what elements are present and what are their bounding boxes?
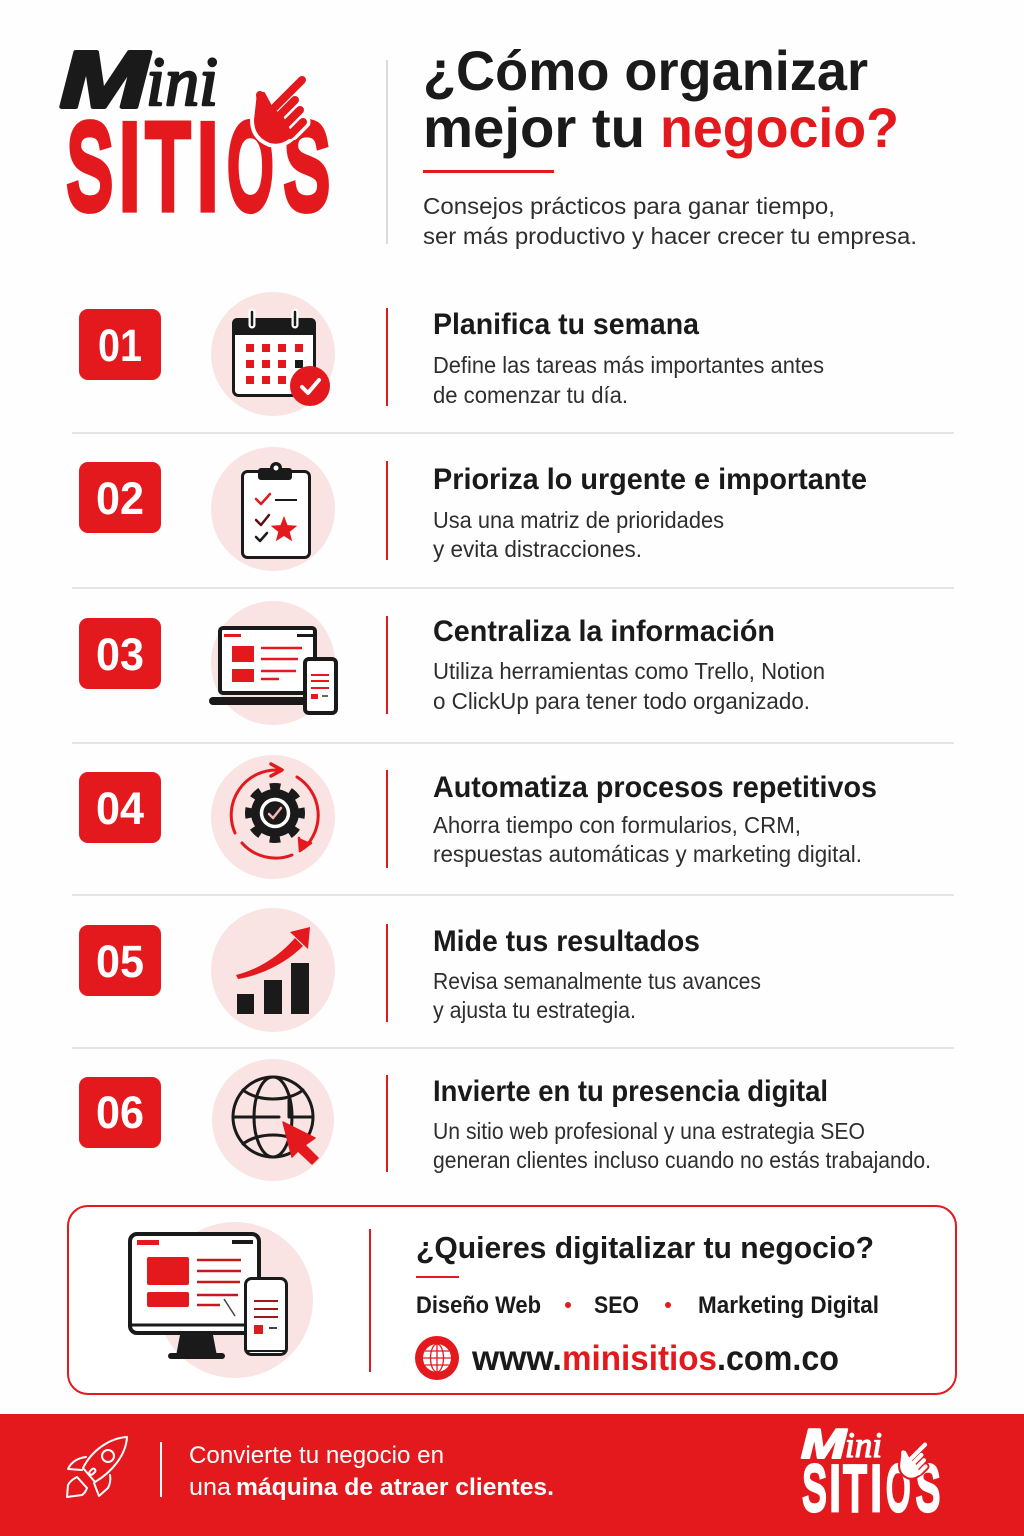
step description: Revisa semanalmente tus avances: [433, 968, 761, 994]
services list: SEO: [594, 1292, 639, 1319]
footer slogan: [189, 1442, 554, 1501]
number badge 04: [79, 772, 161, 843]
step description: [433, 658, 825, 714]
logo script word: ini: [146, 44, 218, 121]
footer logo: S: [802, 1453, 826, 1524]
step 02: [79, 447, 867, 571]
logo: Mini Sitios: [60, 35, 329, 234]
number badge 05: 05: [96, 936, 144, 987]
step description: Define las tareas más importantes antes: [433, 352, 824, 378]
icon: gear with cycle arrows: [211, 755, 335, 879]
subtitle: [423, 193, 917, 249]
step description: o ClickUp para tener todo organizado.: [433, 688, 810, 714]
icon: web globe: [415, 1336, 459, 1380]
title underline: [423, 170, 554, 173]
step 01: [79, 292, 824, 416]
footer logo: T: [844, 1454, 867, 1525]
number badge 02: [79, 462, 161, 533]
logo block word: I: [118, 99, 141, 233]
number badge 06: 06: [96, 1087, 144, 1138]
call to action heading: ¿Quieres digitalizar tu negocio?: [416, 1230, 874, 1265]
step description: generan clientes incluso cuando no estás trabajando.: [433, 1147, 931, 1173]
logo script word: [60, 35, 218, 124]
step description: de comenzar tu día.: [433, 382, 628, 408]
footer band: [0, 1414, 1024, 1536]
step description: Usa una matriz de prioridades: [433, 507, 724, 533]
step 05: [79, 908, 761, 1032]
step description: Utiliza herramientas como Trello, Notion: [433, 658, 825, 684]
title: [423, 39, 899, 159]
icon: globe with cursor: [212, 1059, 334, 1181]
step description: [433, 812, 862, 867]
step title: Planifica tu semana: [433, 308, 699, 341]
step 06: [79, 1059, 931, 1181]
logo block word: [67, 99, 329, 234]
number badge 03: 03: [96, 629, 144, 680]
services list: Marketing Digital: [698, 1292, 879, 1319]
services list: Diseño Web: [416, 1292, 541, 1319]
logo block word: S: [284, 100, 329, 234]
footer logo: I: [829, 1453, 841, 1524]
subtitle: Consejos prácticos para ganar tiempo,: [423, 193, 835, 219]
title: mejor tu: [423, 96, 645, 159]
step title: Prioriza lo urgente e importante: [433, 463, 867, 496]
icon: white pointing hand: [901, 1445, 926, 1477]
footer logo: S: [916, 1453, 940, 1524]
footer logo: I: [870, 1453, 882, 1524]
footer logo: [801, 1420, 940, 1525]
footer logo: O: [886, 1454, 910, 1524]
number badge 01: [79, 309, 161, 380]
step description: respuestas automáticas y marketing digital.: [433, 841, 862, 867]
step description: [433, 968, 761, 1023]
icon: calendar: [211, 292, 335, 416]
icon: clipboard checklist: [211, 447, 335, 571]
step description: Un sitio web profesional y una estrategia SEO: [433, 1118, 865, 1144]
icon: desktop and phone: [130, 1222, 313, 1378]
logo block word: T: [146, 99, 190, 233]
website address: www.: [471, 1339, 562, 1378]
footer slogan: una: [189, 1474, 231, 1501]
step description: [433, 352, 824, 408]
step title: Automatiza procesos repetitivos: [433, 771, 877, 804]
step description: [433, 507, 724, 562]
logo block word: S: [67, 100, 112, 234]
logo script word: M: [60, 35, 151, 124]
website address: .com.co: [717, 1339, 839, 1378]
step 04: [79, 755, 877, 879]
step 03: [79, 601, 825, 725]
website address: [471, 1339, 839, 1378]
step description: [433, 1118, 931, 1173]
logo block word: O: [228, 100, 273, 233]
number badge 04: 04: [96, 783, 144, 834]
header divider: [386, 60, 388, 244]
website address: minisitios: [562, 1339, 717, 1378]
icon: pointing hand: [255, 80, 303, 143]
icon: rocket: [67, 1437, 127, 1497]
footer logo: M: [801, 1420, 847, 1467]
icon: growth bar chart: [211, 908, 335, 1032]
step description: Ahorra tiempo con formularios, CRM,: [433, 812, 801, 838]
number badge 02: 02: [96, 473, 144, 524]
number badge 06: [79, 1077, 161, 1148]
services list: [416, 1292, 879, 1319]
footer slogan: máquina de atraer clientes.: [236, 1474, 554, 1501]
logo block word: I: [196, 99, 219, 233]
step title: Mide tus resultados: [433, 925, 700, 958]
step title: Invierte en tu presencia digital: [433, 1075, 828, 1108]
title: ¿Cómo organizar: [423, 39, 868, 102]
title: negocio?: [660, 96, 899, 159]
icon: laptop and phone: [209, 601, 336, 725]
number badge 03: [79, 618, 161, 689]
step description: y ajusta tu estrategia.: [433, 997, 636, 1023]
panel: call to action: [68, 1206, 956, 1394]
subtitle: ser más productivo y hacer crecer tu empresa.: [423, 223, 917, 249]
footer logo: ini: [845, 1425, 882, 1465]
number badge 01: 01: [98, 320, 142, 371]
step description: y evita distracciones.: [433, 536, 642, 562]
step title: Centraliza la información: [433, 615, 775, 648]
number badge 05: [79, 925, 161, 996]
footer slogan: Convierte tu negocio en: [189, 1442, 444, 1469]
